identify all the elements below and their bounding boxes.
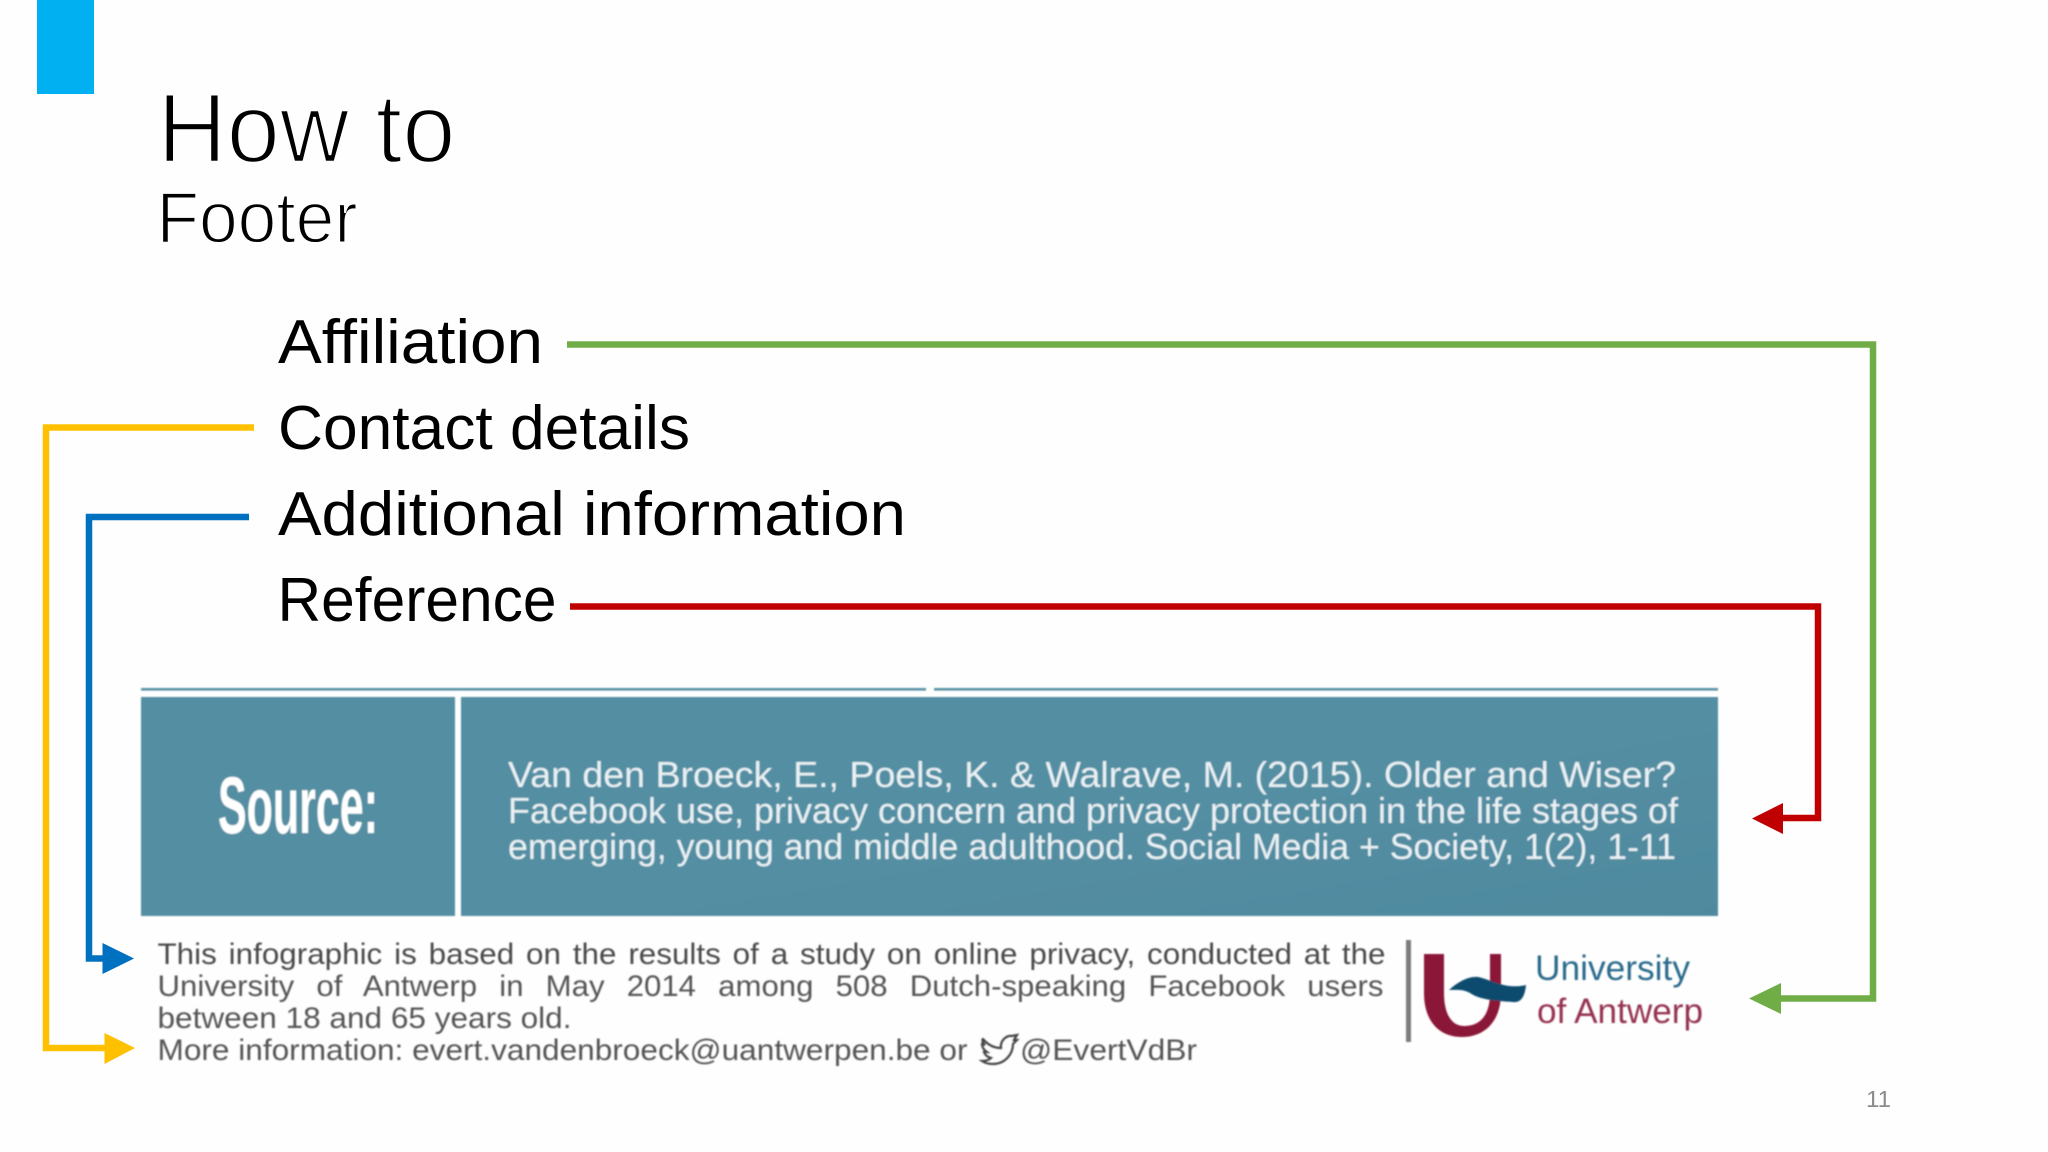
panel: source label	[141, 697, 455, 916]
arrow: contact details to contact line	[46, 428, 254, 1064]
logo mark: wave	[1449, 977, 1526, 1002]
arrow: reference to source panel	[570, 606, 1818, 834]
accent square	[37, 0, 94, 94]
page number: 11	[1866, 1086, 1891, 1112]
contact line: @EvertVdBr	[1020, 1034, 1197, 1067]
logo text: University	[1535, 949, 1691, 988]
additional information paragraph: This infographic is based on the results of a study on online privacy, conducted at the	[158, 938, 1386, 971]
citation text: emerging, young and middle adulthood. Social Media + Society, 1(2), 1-11	[508, 826, 1676, 867]
logo separator	[1406, 940, 1411, 1042]
citation text: Van den Broeck, E., Poels, K. & Walrave, M. (2015). Older and Wiser?	[508, 754, 1676, 795]
source heading: Source:	[218, 761, 378, 851]
logo: University of Antwerp: of Antwerp	[1537, 992, 1703, 1031]
arrow: additional information to paragraph	[89, 517, 249, 974]
additional information paragraph: University of Antwerp in May 2014 among 508 Dutch-speaking Facebook users	[158, 970, 1384, 1003]
title: How to	[158, 73, 456, 183]
label: affiliation: Affiliation	[278, 308, 543, 377]
arrow: affiliation to logo	[567, 344, 1873, 1014]
top rule	[141, 688, 1718, 691]
logo: University of Antwerp	[1424, 949, 1703, 1037]
label: contact details: Contact details	[278, 394, 690, 463]
additional information paragraph	[158, 938, 1386, 1035]
subtitle: Footer	[156, 178, 358, 258]
icon: twitter bird	[982, 1035, 1017, 1064]
citation text: Facebook use, privacy concern and privacy protection in the life stages of	[508, 790, 1679, 831]
additional information paragraph: between 18 and 65 years old.	[158, 1002, 572, 1035]
panel: reference citation	[461, 697, 1718, 916]
example footer	[141, 688, 1718, 1067]
contact line: More information: evert.vandenbroeck@uantwerpen.be or	[158, 1034, 968, 1067]
label: additional information: Additional information	[278, 480, 906, 549]
logo mark: U	[1424, 954, 1501, 1037]
label: reference: Reference	[278, 566, 556, 635]
citation text	[508, 754, 1679, 867]
